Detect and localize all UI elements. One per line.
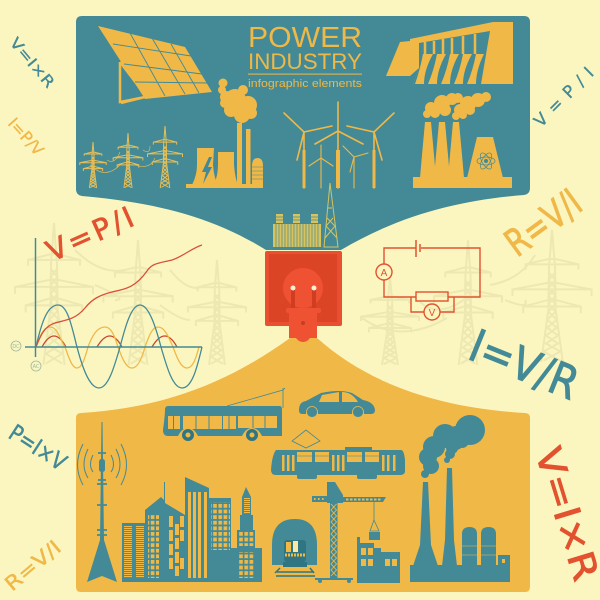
chart: circuit diagram: V — [429, 308, 436, 319]
icon: factory with smoke — [410, 415, 510, 582]
icon: wind turbines — [284, 102, 394, 188]
formula: I=P/V: I=P/V — [4, 114, 48, 159]
chart: circuit diagram — [376, 240, 480, 320]
icon: electrical plug — [265, 251, 342, 342]
icon: metro train tunnel — [272, 519, 317, 576]
chart: AC DC waveforms: AC — [33, 364, 40, 370]
chart: AC DC waveforms: DC — [12, 344, 20, 350]
background pylons left — [15, 223, 246, 365]
icon: city skyline — [122, 477, 262, 582]
formula: P=IxV: P=I×V — [4, 420, 71, 476]
formula: V=IxR right: V=I×R — [526, 443, 600, 586]
icon: TV tower — [78, 422, 126, 582]
icon: hydroelectric dam — [386, 22, 513, 84]
icon: car — [299, 391, 375, 418]
background pylons right — [75, 230, 592, 365]
formula: V=IxR top left: V=I×R — [6, 34, 58, 92]
icon: thermal power plant — [186, 78, 263, 188]
top panel: power generation — [76, 16, 530, 250]
title: INDUSTRY — [248, 49, 362, 74]
icon: solar panel — [98, 26, 212, 103]
chart: circuit diagram: A — [381, 268, 388, 279]
icon: trolley bus — [163, 388, 285, 441]
chart: AC DC waveforms — [11, 238, 202, 388]
icon: substation on plug — [273, 183, 338, 247]
title — [248, 22, 363, 90]
icon: tram — [271, 430, 405, 479]
formula: V=P/I chart: V = P / I — [41, 200, 139, 268]
title: infographic elements — [248, 78, 363, 90]
formula: R=V/I bottom left: R=V/I — [0, 535, 66, 596]
bottom panel: power consumption — [76, 338, 530, 592]
icon: nuclear power plant — [413, 92, 512, 188]
icon: crane — [312, 482, 386, 583]
formula: V=P/I top right: V = P / I — [530, 64, 598, 132]
icon: pylons with wires — [80, 126, 182, 188]
formula: I=V/R: I=V/R — [462, 319, 587, 411]
icon: building under construction — [357, 537, 400, 583]
title: POWER — [248, 22, 362, 54]
